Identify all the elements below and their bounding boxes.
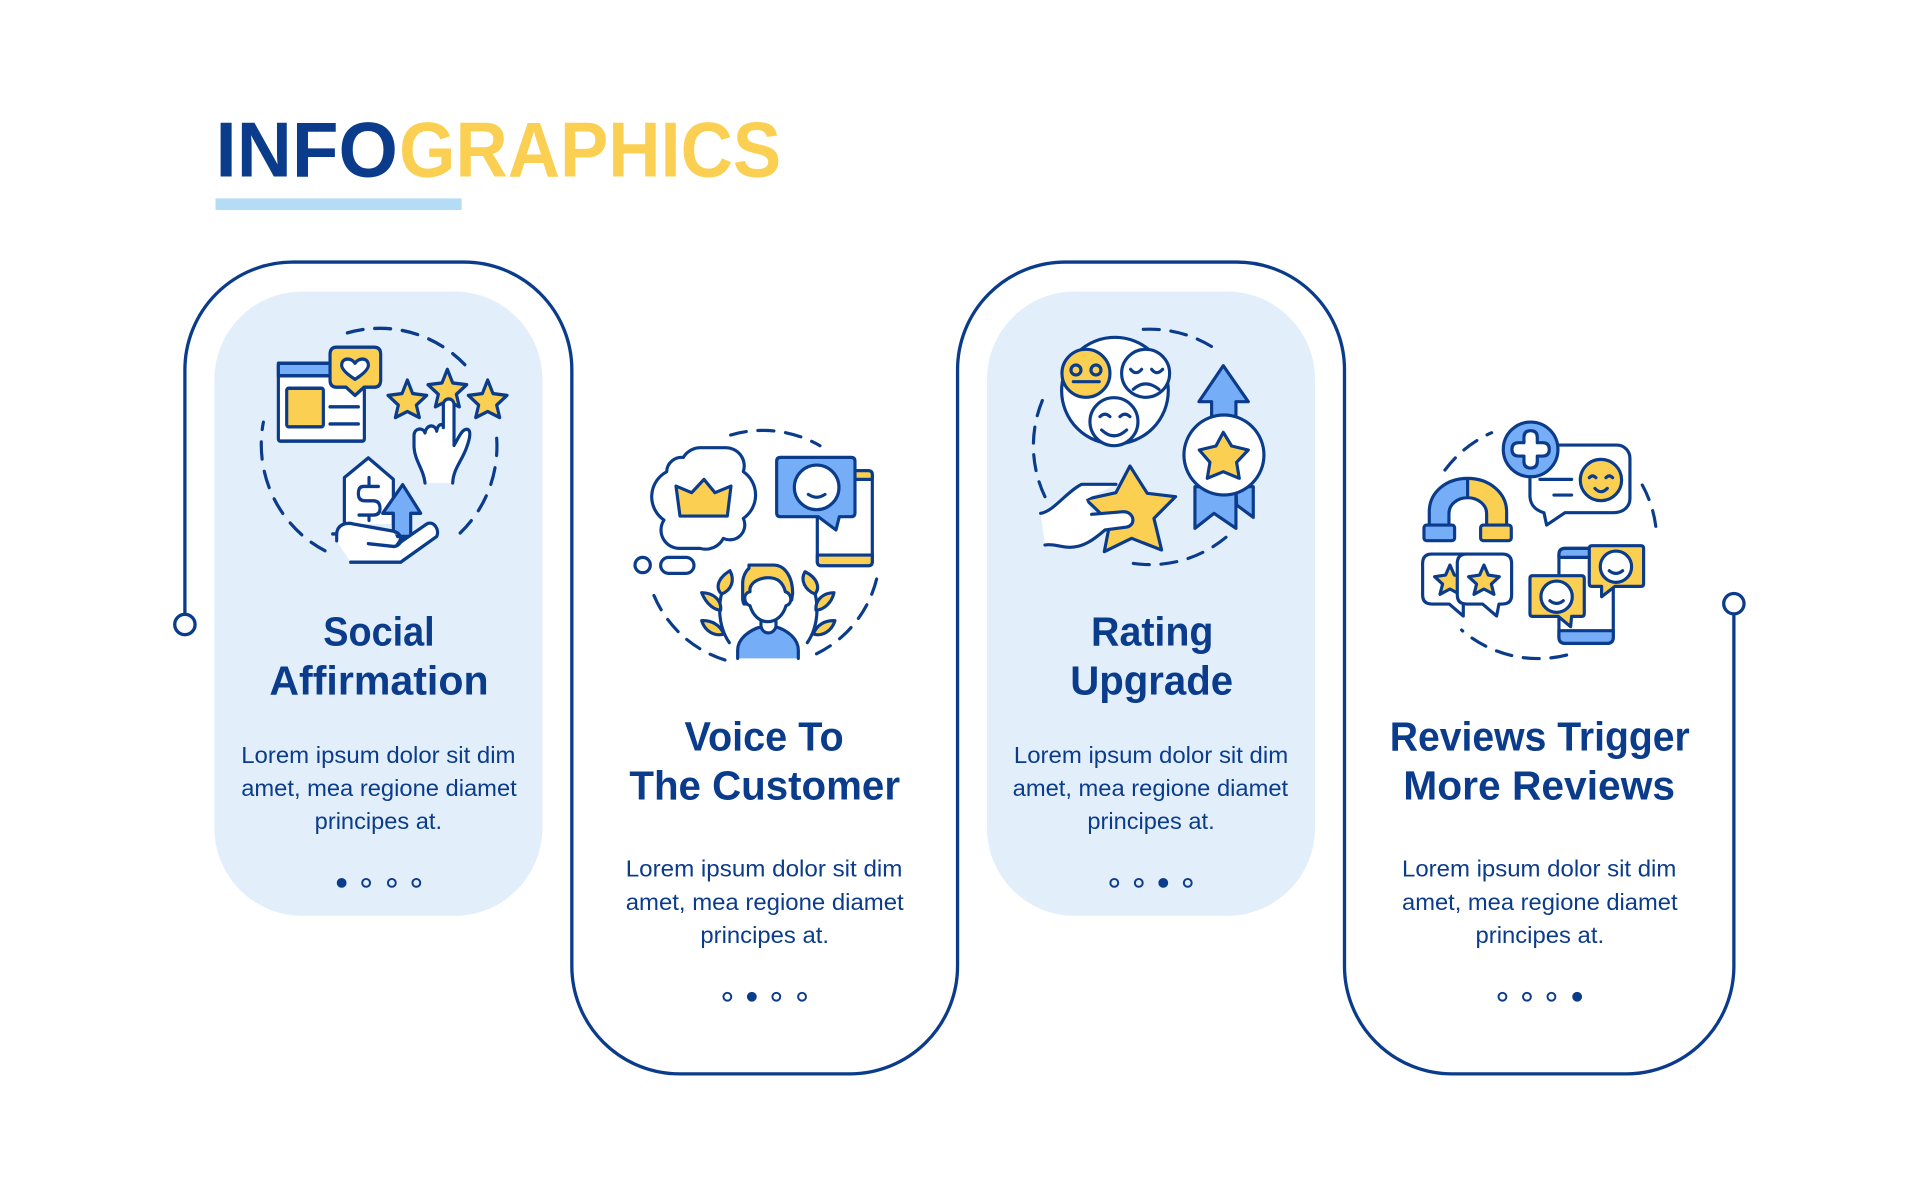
body text: rating upgrade [1013, 742, 1289, 834]
panel: reviews trigger more reviews [1390, 422, 1690, 1001]
heading: reviews trigger more reviews [1390, 714, 1690, 809]
icon: social affirmation [261, 328, 507, 562]
icon: rating upgrade [1033, 329, 1264, 565]
body text: reviews trigger more reviews [1402, 856, 1678, 948]
body text: voice to the customer: amet, mea regione diamet [626, 889, 904, 915]
body text: voice to the customer: Lorem ipsum dolor sit dim [626, 856, 902, 882]
heading: voice to the customer: Voice To [684, 714, 844, 760]
body text: social affirmation: amet, mea regione diamet [241, 775, 517, 801]
icon: voice to the customer [635, 430, 877, 660]
heading: rating upgrade: Upgrade [1070, 657, 1233, 703]
body text: reviews trigger more reviews: principes at. [1476, 922, 1604, 948]
heading: voice to the customer [629, 714, 900, 809]
heading: reviews trigger more reviews: More Reviews [1403, 763, 1675, 809]
body text: social affirmation: Lorem ipsum dolor sit dim [241, 742, 516, 768]
heading: social affirmation [269, 608, 489, 703]
heading: rating upgrade: Rating [1091, 608, 1213, 654]
pagination dots: step 4 [1499, 993, 1581, 1001]
panel background: social affirmation [214, 291, 542, 916]
body text: voice to the customer: principes at. [700, 922, 829, 948]
panel: social affirmation [241, 328, 517, 887]
body text: rating upgrade: amet, mea regione diamet [1013, 775, 1289, 801]
title: INFO [216, 105, 398, 193]
icon: reviews trigger more reviews [1423, 422, 1657, 659]
heading: social affirmation: Affirmation [269, 657, 489, 703]
heading: rating upgrade [1070, 608, 1233, 703]
body text: social affirmation [241, 742, 517, 834]
title: GRAPHICS [399, 105, 781, 193]
panel background: rating upgrade [987, 291, 1315, 916]
body text: rating upgrade: Lorem ipsum dolor sit dim [1014, 742, 1288, 768]
panel: rating upgrade [1013, 329, 1289, 887]
title underline [216, 198, 462, 210]
heading: reviews trigger more reviews: Reviews Trigger [1390, 714, 1690, 760]
body text: reviews trigger more reviews: amet, mea regione diamet [1402, 889, 1678, 915]
body text: reviews trigger more reviews: Lorem ipsum dolor sit dim [1402, 856, 1676, 882]
connecting timeline outline [175, 262, 1744, 1074]
pagination dots: step 2 [723, 993, 806, 1001]
title [216, 105, 781, 193]
pagination dots: step 3 [1110, 879, 1192, 887]
pagination dots: step 1 [338, 879, 420, 887]
body text: social affirmation: principes at. [315, 808, 442, 834]
heading: social affirmation: Social [323, 608, 435, 654]
panel: voice to the customer [626, 430, 904, 1001]
body text: voice to the customer [626, 856, 904, 948]
heading: voice to the customer: The Customer [629, 763, 900, 809]
body text: rating upgrade: principes at. [1087, 808, 1215, 834]
